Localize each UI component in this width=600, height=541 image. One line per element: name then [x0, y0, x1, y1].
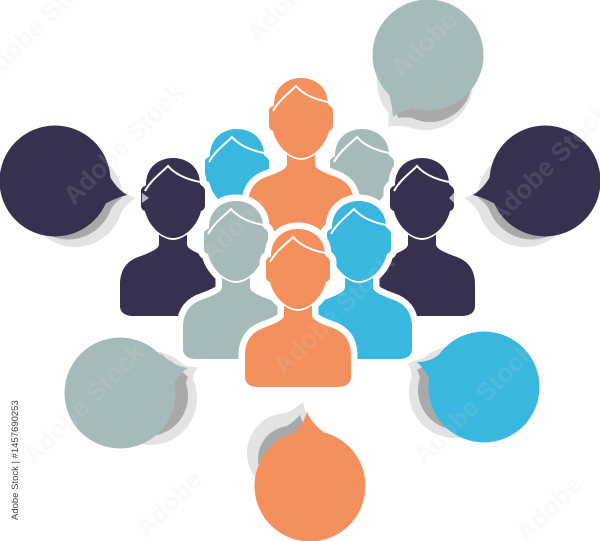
watermark: diagonal Adobe Stock marks: Adobe [194, 189, 273, 268]
person: grey middle left [183, 201, 289, 359]
speech bubble: orange bottom [247, 402, 366, 541]
person: navy right [369, 158, 475, 316]
speech bubble: blue bottom right [407, 332, 540, 442]
watermark: diagonal Adobe Stock marks: Adobe Stock [407, 336, 541, 470]
watermark: diagonal Adobe Stock marks: Adobe Stock [17, 336, 151, 470]
watermark: diagonal Adobe Stock marks: Adobe Stock [57, 76, 191, 210]
watermark: diagonal Adobe Stock marks: Adobe [384, 4, 463, 83]
watermark: diagonal Adobe Stock marks: Adobe [129, 464, 208, 541]
speech bubble: navy left [0, 126, 136, 247]
person: blue middle right [306, 201, 412, 359]
person: navy left [120, 158, 226, 316]
watermark: diagonal Adobe Stock marks: Adobe Stock [267, 246, 401, 380]
person: grey back right [330, 129, 394, 209]
speech bubble: grey top [372, 0, 484, 130]
speech bubble: navy right [464, 126, 600, 247]
speech bubble: grey bottom left [64, 338, 198, 448]
person: orange back centre [248, 78, 354, 236]
person: blue back left [205, 129, 269, 209]
person: orange front centre [245, 229, 351, 387]
stock credit: vertical text: Adobe Stock | #1457690253 [10, 400, 21, 520]
